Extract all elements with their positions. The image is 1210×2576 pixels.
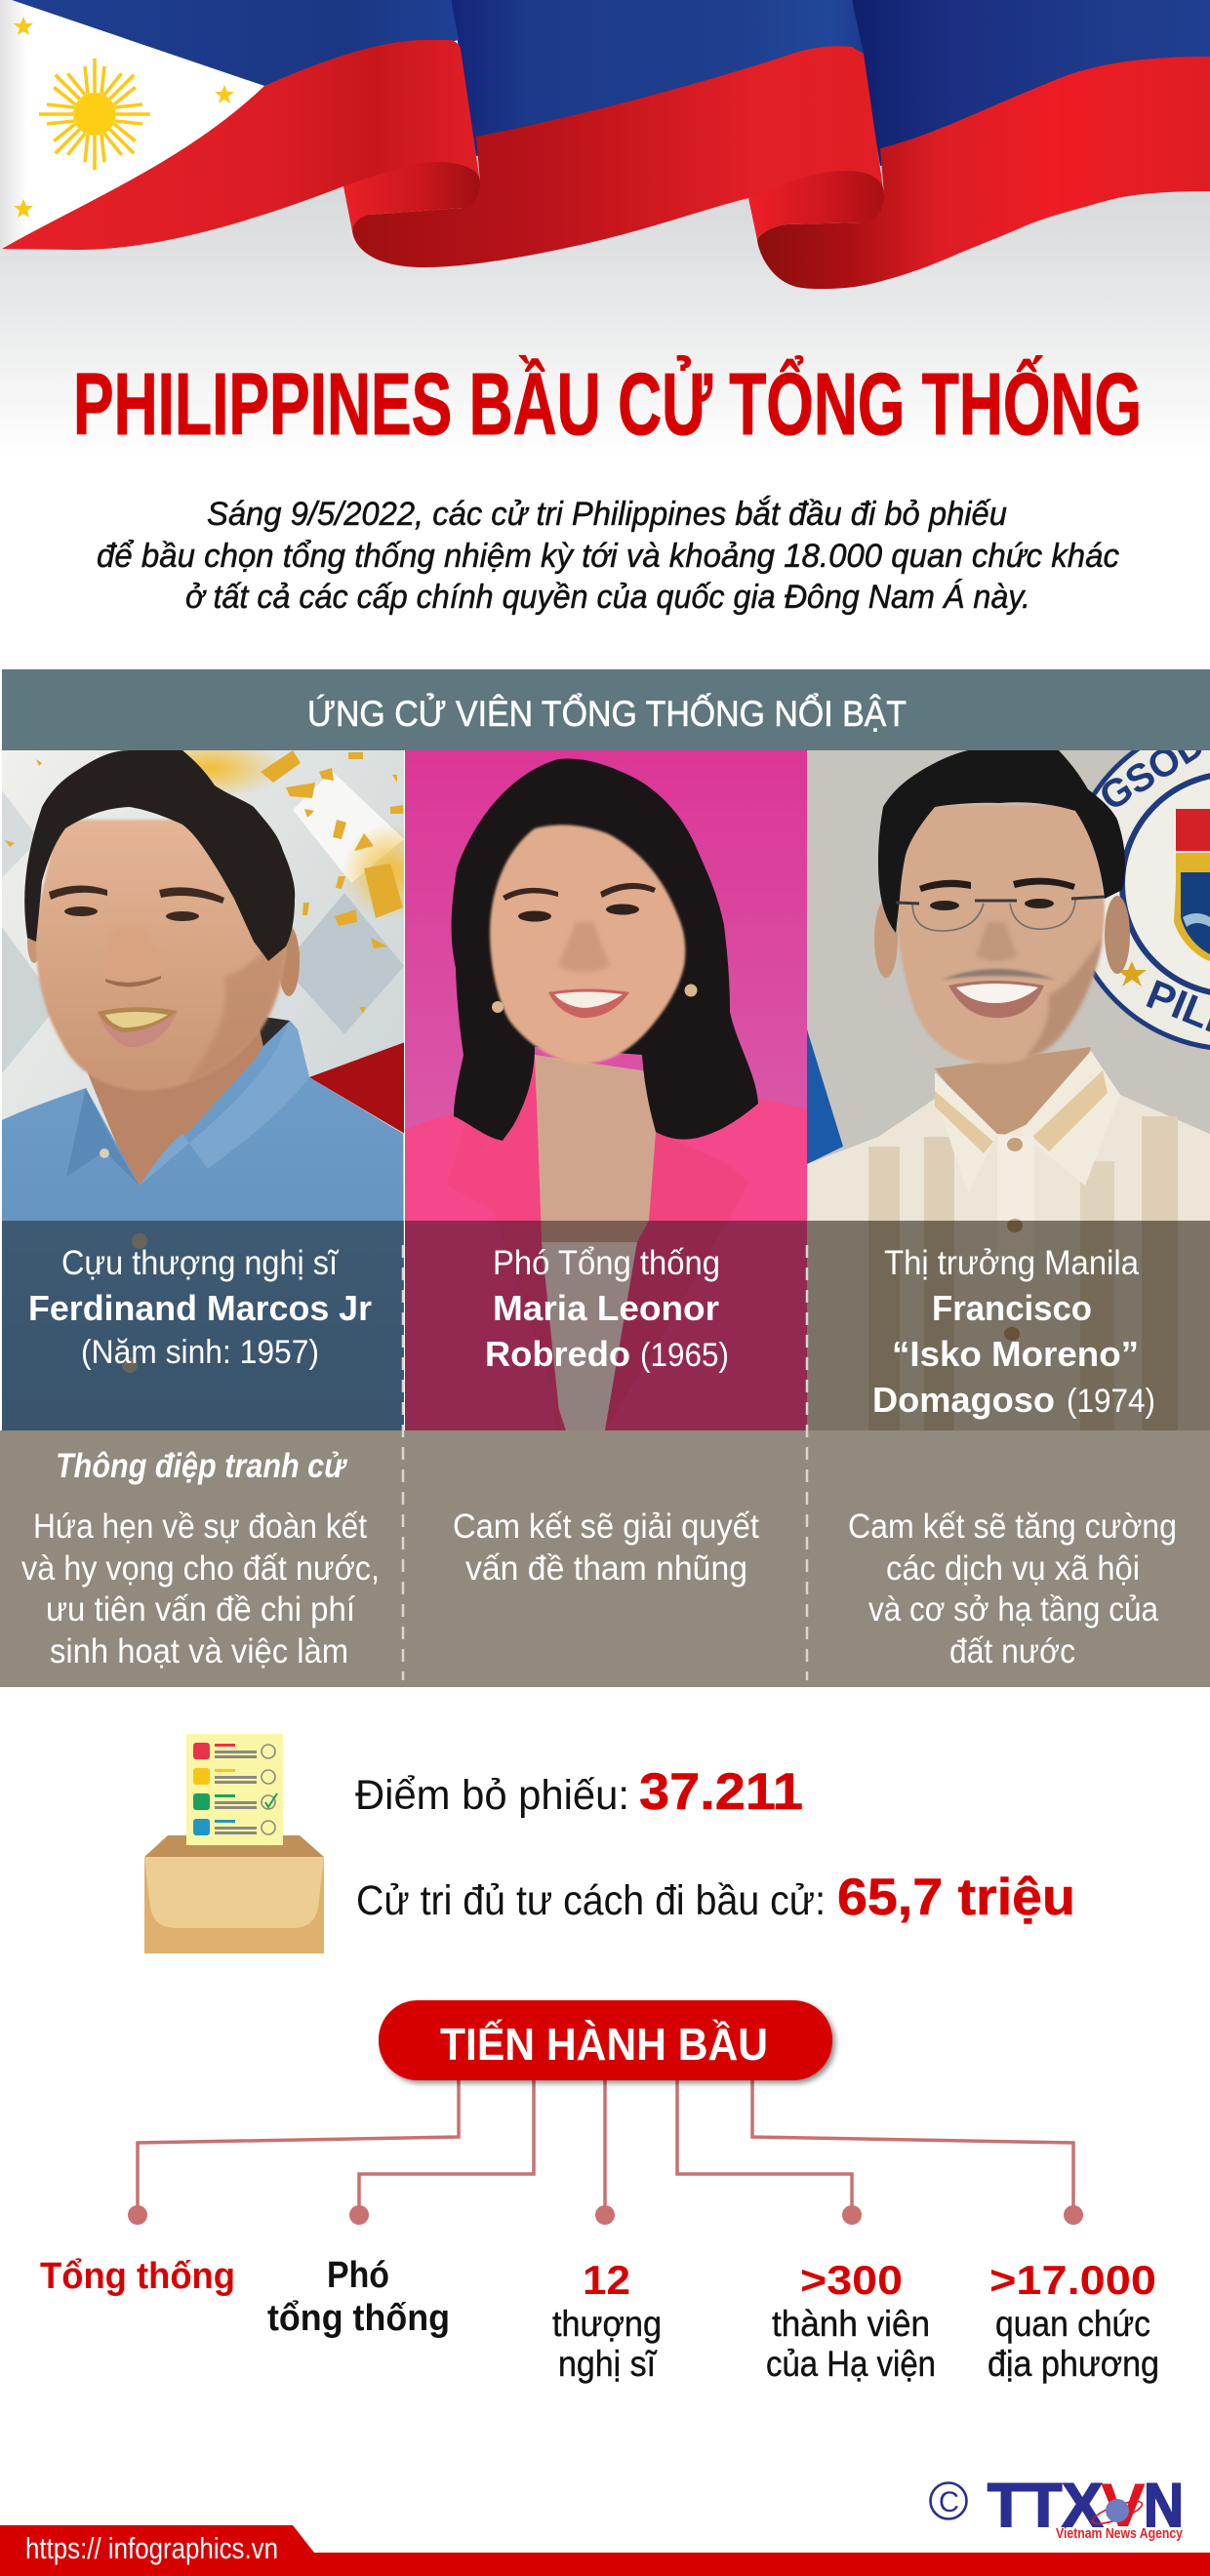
footer bar xyxy=(0,2525,1210,2576)
intro text: để bầu chọn tổng thống nhiệm kỳ tới và khoảng 18.000 quan chức khác xyxy=(97,538,1119,575)
item: vice president: Phó xyxy=(327,2255,389,2296)
section heading: ỨNG CỬ VIÊN TỔNG THỐNG NỔI BẬT xyxy=(307,692,907,734)
message: Robredo xyxy=(453,1508,759,1588)
portrait: Maria Leonor Robredo xyxy=(405,750,807,1430)
connector lines xyxy=(138,2080,1073,2207)
item: house members: >300 xyxy=(800,2257,903,2303)
item: local officials: quan chức xyxy=(995,2304,1150,2344)
icon: star top xyxy=(14,17,33,35)
caption overlay: Domagoso: Domagoso xyxy=(872,1380,1055,1420)
item: vice president xyxy=(267,2255,450,2339)
item: house members: của Hạ viện xyxy=(766,2344,936,2384)
caption overlay: Robredo: Maria Leonor xyxy=(493,1288,719,1328)
portrait: Ferdinand Marcos Jr xyxy=(2,737,439,1430)
stat: eligible voters xyxy=(356,1869,1075,1926)
portrait: Francisco Isko Moreno Domagoso xyxy=(807,719,1210,1430)
icon: sun xyxy=(39,59,150,170)
stat: polling stations xyxy=(355,1763,803,1821)
caption overlay: Marcos: (Năm sinh: 1957) xyxy=(81,1334,319,1371)
background gradient xyxy=(0,156,1210,459)
icon: star bottom xyxy=(14,199,33,218)
footer bar: https:// infographics.vn xyxy=(25,2531,278,2565)
item: president: Tổng thống xyxy=(40,2256,235,2297)
caption overlay: Domagoso xyxy=(807,1221,1210,1430)
stat: polling stations: Điểm bỏ phiếu: xyxy=(355,1772,629,1819)
logo: TTXVN: N xyxy=(1144,2472,1184,2540)
intro text: Sáng 9/5/2022, các cử tri Philippines bắt đầu đi bỏ phiếu xyxy=(207,496,1007,533)
message: Marcos: ưu tiên vấn đề chi phí xyxy=(46,1590,355,1629)
item: local officials: >17.000 xyxy=(989,2257,1156,2303)
intro text xyxy=(97,496,1119,616)
message: Marcos: và hy vọng cho đất nước, xyxy=(21,1550,380,1588)
item: senators: nghị sĩ xyxy=(558,2344,658,2384)
message: Domagoso xyxy=(848,1508,1177,1670)
messages heading: Thông điệp tranh cử xyxy=(56,1447,348,1485)
item: senators: 12 xyxy=(583,2257,630,2303)
caption overlay: Robredo: (1965) xyxy=(640,1337,729,1374)
message: Marcos: Hứa hẹn về sự đoàn kết xyxy=(33,1508,367,1546)
message: Marcos xyxy=(21,1508,380,1670)
message: Domagoso: đất nước xyxy=(949,1632,1075,1670)
logo: TTXVN xyxy=(931,2472,1184,2542)
item: local officials xyxy=(988,2257,1159,2384)
item: vice president: tổng thống xyxy=(267,2298,450,2339)
panel: campaign messages xyxy=(0,1245,1210,1687)
message: Domagoso: Cam kết sẽ tăng cường xyxy=(848,1508,1177,1546)
logo: TTXVN: TTX xyxy=(988,2472,1103,2540)
caption overlay: Robredo: Robredo xyxy=(485,1334,630,1374)
caption overlay: Robredo xyxy=(405,1221,807,1430)
button: election heading: TIẾN HÀNH BẦU xyxy=(440,2019,768,2070)
caption overlay: Domagoso: Francisco xyxy=(932,1288,1092,1328)
caption overlay: Domagoso: “Isko Moreno” xyxy=(892,1334,1139,1374)
message: Marcos: sinh hoạt và việc làm xyxy=(50,1632,348,1670)
connector dots xyxy=(128,2205,1083,2225)
stat: polling stations: 37.211 xyxy=(639,1763,803,1821)
caption overlay: Robredo: Phó Tổng thống xyxy=(493,1244,720,1282)
icon: star right xyxy=(215,85,234,103)
caption overlay: Domagoso: Thị trưởng Manila xyxy=(884,1244,1139,1282)
panel: candidates header xyxy=(2,669,1210,750)
caption overlay: Domagoso: (1974) xyxy=(1067,1383,1155,1420)
logo: TTXVN: C xyxy=(939,2486,959,2518)
caption overlay: Marcos xyxy=(2,1221,404,1430)
message: Robredo: vấn đề tham nhũng xyxy=(465,1550,747,1588)
flag banner xyxy=(0,0,1210,289)
item: senators xyxy=(552,2257,662,2384)
message: Domagoso: và cơ sở hạ tầng của xyxy=(868,1590,1158,1629)
portrait: Francisco Isko Moreno Domagoso: GSOD xyxy=(1092,722,1210,820)
icon: ballot box xyxy=(144,1734,324,1953)
caption overlay: Marcos: Cựu thượng nghị sĩ xyxy=(61,1244,340,1282)
item: house members xyxy=(766,2257,936,2384)
stat: eligible voters: 65,7 triệu xyxy=(837,1869,1075,1926)
button: election heading xyxy=(379,2000,832,2080)
intro text: ở tất cả các cấp chính quyền của quốc gia Đông Nam Á này. xyxy=(185,579,1030,616)
logo: TTXVN: Vietnam News Agency xyxy=(1056,2525,1184,2542)
message: Robredo: Cam kết sẽ giải quyết xyxy=(453,1508,759,1546)
caption overlay: Marcos: Ferdinand Marcos Jr xyxy=(28,1288,372,1328)
message: Domagoso: các dịch vụ xã hội xyxy=(886,1550,1140,1588)
item: senators: thượng xyxy=(552,2304,662,2344)
item: house members: thành viên xyxy=(772,2304,930,2344)
item: local officials: địa phương xyxy=(988,2344,1159,2384)
stat: eligible voters: Cử tri đủ tư cách đi bầu cử: xyxy=(356,1877,826,1924)
logo: TTXVN: V xyxy=(1101,2472,1146,2540)
